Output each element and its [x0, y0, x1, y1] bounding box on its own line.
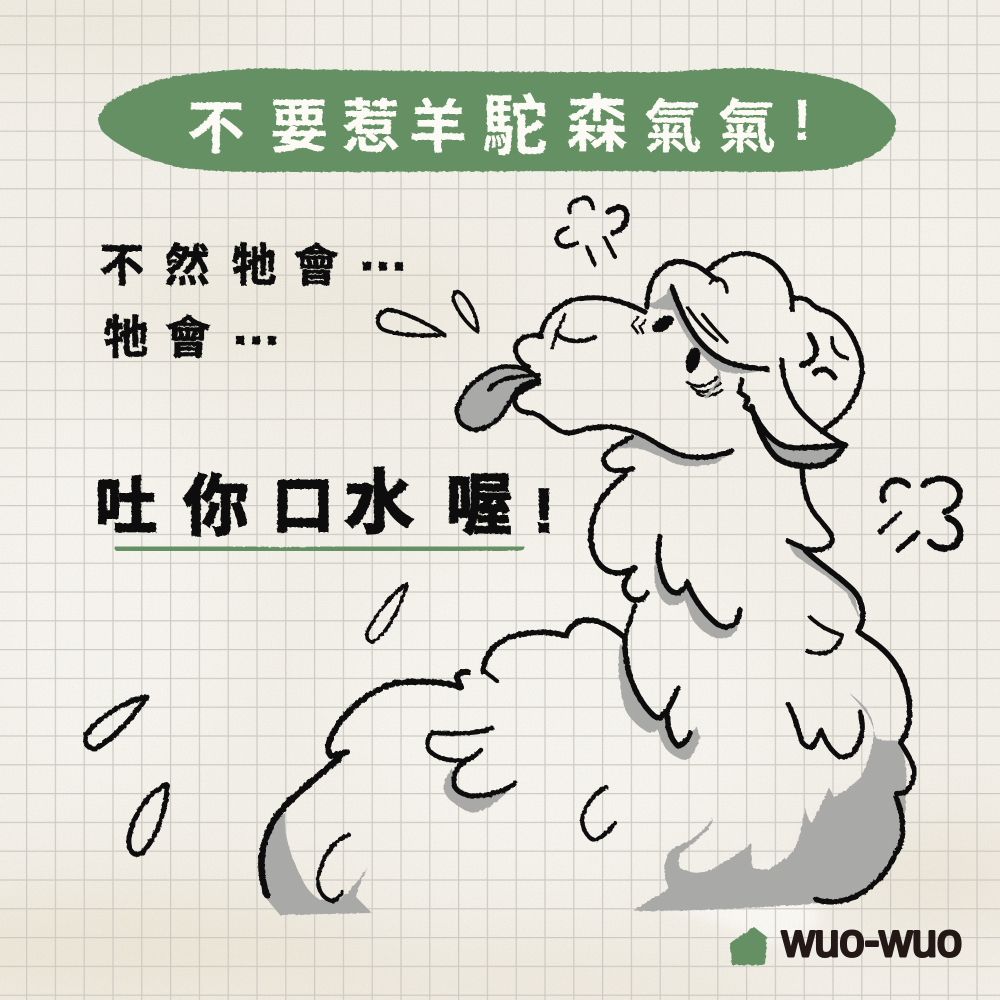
title banner	[98, 68, 896, 172]
open eyes	[632, 312, 722, 398]
line one: 不然牠會…: 不	[99, 240, 145, 291]
logo wordmark: wuo-wuo	[781, 914, 962, 966]
line two: 牠會…: 會	[165, 312, 211, 363]
green underline	[118, 547, 521, 550]
line two: 牠會…	[103, 299, 281, 363]
head outline	[515, 253, 862, 458]
line one: 不然牠會…: 然	[164, 240, 210, 291]
angry face on hair	[802, 335, 847, 378]
punchline: 吐你口水喔!: 水	[344, 464, 414, 542]
spit droplets	[85, 292, 478, 854]
title text: 惹	[342, 95, 400, 160]
title text: 羊	[409, 95, 467, 160]
alpaca shading	[259, 283, 906, 915]
title text: 森	[566, 91, 628, 160]
title text: 駝	[482, 89, 548, 163]
line one: 不然牠會…: 牠	[231, 240, 277, 291]
intro text	[99, 225, 408, 363]
ear	[752, 360, 845, 467]
body fur lines	[261, 620, 624, 901]
punchline: 吐你口水喔!: 你	[183, 469, 249, 543]
line two: 牠會…: …	[231, 299, 281, 355]
line one: 不然牠會…	[99, 225, 408, 291]
banner brush shape	[98, 68, 896, 172]
title text	[187, 88, 812, 163]
closed eye and brow	[552, 315, 595, 348]
logo house icon	[730, 927, 767, 965]
title text: 氣	[644, 95, 702, 160]
line one: 不然牠會…: …	[358, 225, 408, 281]
punchline: 吐你口水喔!: 口	[272, 472, 334, 541]
neck and chest fur lines	[591, 437, 914, 902]
tongue	[457, 366, 539, 430]
line one: 不然牠會…: 會	[293, 240, 339, 291]
line two: 牠會…: 牠	[103, 312, 149, 363]
title text: 要	[270, 95, 328, 160]
anger puff right	[880, 478, 960, 550]
alpaca illustration	[259, 253, 914, 915]
punchline: 吐你口水喔!	[95, 464, 554, 546]
title text: !	[792, 88, 812, 153]
punchline: 吐你口水喔!: 吐	[95, 473, 157, 542]
title text: 氣	[718, 95, 776, 160]
title text: 不	[187, 96, 245, 161]
anger puff top	[557, 198, 627, 265]
logo	[730, 914, 962, 966]
punchline: 吐你口水喔!: 喔	[446, 468, 512, 542]
punchline: 吐你口水喔!: !	[534, 477, 554, 546]
